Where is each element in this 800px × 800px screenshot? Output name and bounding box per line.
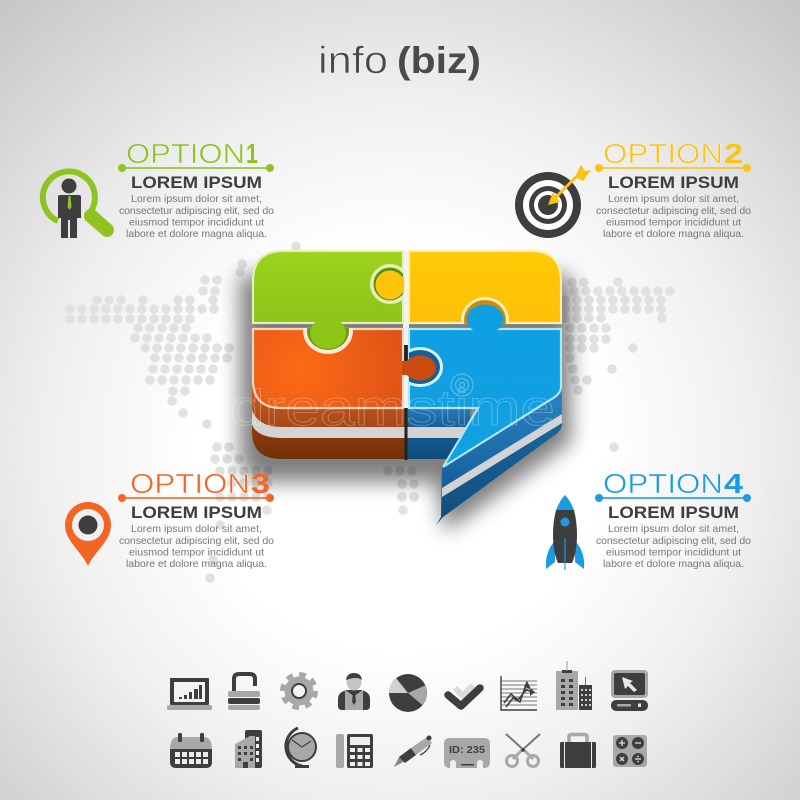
- watermark: dreamstime: [230, 380, 555, 436]
- icon: id card: [444, 738, 490, 768]
- icon: open lock: [228, 674, 260, 710]
- icon: calculator: [336, 734, 373, 768]
- divider: [118, 164, 274, 172]
- yellow piece: [409, 251, 561, 323]
- heading: 4: [724, 468, 744, 499]
- icon: scissors: [506, 734, 540, 766]
- body text: Lorem ipsum dolor sit amet,: [608, 523, 739, 535]
- title: [318, 40, 481, 82]
- icon: briefcase: [560, 734, 596, 768]
- body text: consectetur adipiscing elit, sed do: [119, 535, 274, 547]
- body text: labore et dolore magna aliqua.: [126, 228, 267, 240]
- icon: laptop chart: [167, 678, 212, 710]
- orange knob: [402, 347, 443, 387]
- icon: pie chart: [389, 674, 428, 712]
- title: info: [318, 40, 388, 82]
- icon: calculator buttons: [613, 735, 647, 767]
- option 2: [595, 138, 751, 240]
- body text: labore et dolore magna aliqua.: [126, 558, 267, 570]
- dotted world map: [70, 246, 682, 578]
- option 1: [118, 138, 274, 240]
- icon: businessman: [338, 673, 370, 710]
- body text: [596, 193, 751, 240]
- drop shadow: [240, 275, 571, 532]
- body text: labore et dolore magna aliqua.: [603, 228, 744, 240]
- body text: [596, 523, 751, 570]
- divider: [595, 164, 751, 172]
- green piece: [253, 251, 403, 323]
- icon: magnifier with person: [43, 171, 107, 238]
- blue piece: [409, 329, 561, 467]
- icon: pen: [394, 736, 432, 767]
- icon: office buildings: [556, 661, 592, 710]
- subheading: LOREM IPSUM: [131, 173, 262, 192]
- body text: Lorem ipsum dolor sit amet,: [131, 193, 262, 205]
- body text: eiusmod tempor incididunt ut: [129, 546, 264, 558]
- subheading: LOREM IPSUM: [131, 503, 262, 522]
- subheading: LOREM IPSUM: [608, 173, 739, 192]
- icon: map pin: [65, 502, 111, 566]
- icon: city block: [235, 730, 262, 768]
- body text: eiusmod tempor incididunt ut: [606, 546, 741, 558]
- heading: OPTION: [603, 138, 723, 169]
- body text: labore et dolore magna aliqua.: [603, 558, 744, 570]
- body text: consectetur adipiscing elit, sed do: [596, 535, 751, 547]
- seam: [403, 251, 409, 408]
- body text: [119, 523, 274, 570]
- icon: computer cursor: [611, 670, 648, 711]
- divider: [595, 494, 751, 502]
- orange piece: [253, 329, 403, 408]
- icon: gear: [283, 675, 315, 707]
- icon: calendar: [170, 733, 212, 768]
- divider: [118, 494, 274, 502]
- icon: rocket: [546, 495, 584, 570]
- puzzle speech bubble: [230, 251, 571, 532]
- body text: [119, 193, 274, 240]
- body text: eiusmod tempor incididunt ut: [129, 216, 264, 228]
- title: (biz): [397, 40, 481, 81]
- blue knob: [461, 297, 509, 330]
- body text: consectetur adipiscing elit, sed do: [596, 205, 751, 217]
- 3D side of blue piece and tail: [407, 386, 562, 525]
- body text: eiusmod tempor incididunt ut: [606, 216, 741, 228]
- green knob: [303, 322, 353, 354]
- body text: Lorem ipsum dolor sit amet,: [608, 193, 739, 205]
- heading: 2: [724, 138, 743, 169]
- icon row: [170, 728, 647, 768]
- heading: OPTION: [603, 468, 723, 499]
- heading: OPTION: [130, 468, 250, 499]
- icon row: [167, 661, 648, 712]
- heading: 3: [251, 468, 270, 499]
- body text: consectetur adipiscing elit, sed do: [119, 205, 274, 217]
- heading: OPTION: [126, 138, 245, 169]
- icon: target with arrow: [515, 165, 591, 238]
- option 4: [595, 468, 751, 570]
- body text: Lorem ipsum dolor sit amet,: [131, 523, 262, 535]
- icon: id card: ID: 235: [449, 744, 485, 756]
- icon: check mark: [448, 685, 480, 706]
- 3D side of orange piece: [252, 385, 405, 459]
- icon: line chart: [501, 676, 537, 710]
- icon: globe clock: [286, 728, 316, 768]
- heading: 1: [246, 138, 258, 169]
- option 3: [118, 468, 274, 570]
- subheading: LOREM IPSUM: [608, 503, 739, 522]
- yellow knob: [370, 264, 404, 304]
